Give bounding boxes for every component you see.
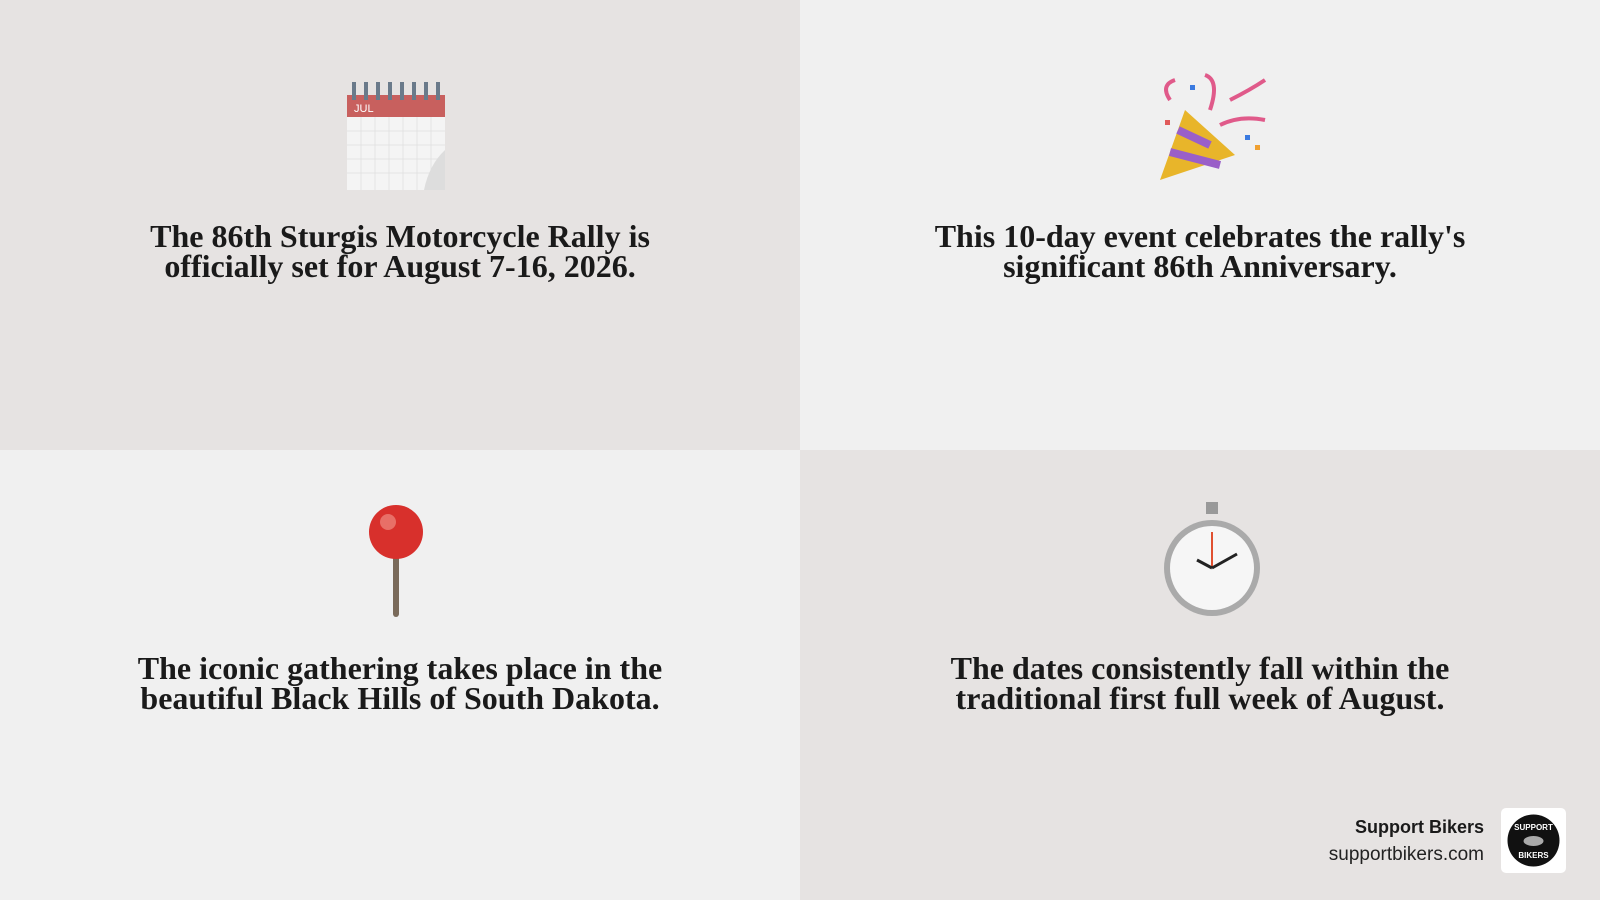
text: brand name: Support Bikers <box>1355 817 1484 837</box>
text: week: traditional first full week of August. <box>956 680 1444 716</box>
text: anniversary: significant 86th Anniversary. <box>1003 248 1397 284</box>
icon: logo <box>1501 808 1566 873</box>
icon: pushpin <box>369 505 423 617</box>
icon: calendar <box>347 82 445 190</box>
footer: brand <box>1329 808 1566 873</box>
text: location <box>138 650 662 716</box>
text: date: The 86th Sturgis Motorcycle Rally is <box>150 218 650 254</box>
icon: stopwatch <box>1164 502 1260 616</box>
text: anniversary: This 10-day event celebrates the rally's <box>935 218 1465 254</box>
panel: anniversary <box>800 0 1600 450</box>
text: location: beautiful Black Hills of South Dakota. <box>140 680 660 716</box>
text: week: The dates consistently fall within the <box>951 650 1449 686</box>
text: location: The iconic gathering takes place in the <box>138 650 662 686</box>
panel: date <box>0 0 800 450</box>
icon: logo: SUPPORT <box>1514 823 1553 832</box>
text: date: officially set for August 7-16, 2026. <box>164 248 636 284</box>
icon: party popper <box>1160 73 1266 180</box>
text: week <box>951 650 1449 716</box>
text: date <box>150 218 650 284</box>
icon: calendar: JUL <box>354 103 374 115</box>
icon: logo: BIKERS <box>1518 851 1549 860</box>
panel: week <box>800 450 1600 900</box>
text: url: supportbikers.com <box>1329 844 1484 865</box>
panel: location <box>0 450 800 900</box>
text: anniversary <box>935 218 1465 284</box>
